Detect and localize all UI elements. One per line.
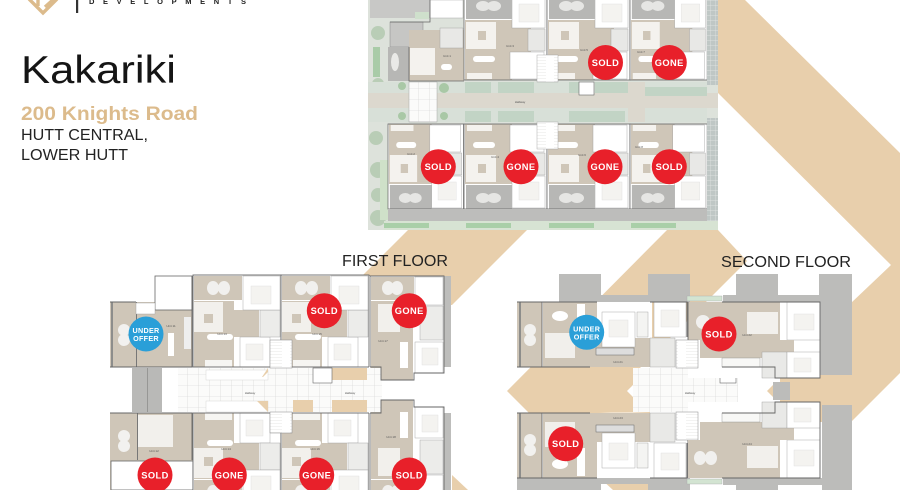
background tan diagonal bands	[363, 0, 900, 490]
units 22 and 24	[688, 302, 820, 478]
badges: second floor status	[548, 315, 736, 461]
lower units	[388, 124, 707, 209]
badge: under offer	[128, 316, 164, 352]
room labels: Unit 7	[637, 50, 645, 54]
room labels	[149, 324, 396, 453]
address lines: LOWER HUTT	[21, 147, 129, 164]
heading: second floor: SECOND FLOOR	[721, 254, 851, 271]
deck and planter	[384, 209, 718, 230]
second floor stairs and balconies	[676, 296, 722, 484]
room labels: Unit 14	[221, 447, 231, 451]
room labels	[407, 44, 645, 159]
badge: sold	[702, 316, 736, 352]
badge: gone	[652, 45, 687, 80]
room labels: Hallway	[345, 391, 356, 395]
room labels: Hallway	[245, 391, 256, 395]
room labels: Unit 22	[742, 333, 752, 337]
badge: gone	[392, 293, 427, 328]
unit 11	[110, 276, 192, 367]
room labels: Unit 4	[491, 155, 499, 159]
badge: under offer: OFFER	[574, 332, 600, 342]
badges: ground floor status	[421, 45, 687, 184]
ground hallway	[368, 82, 718, 122]
badge: gone: GONE	[507, 162, 535, 172]
room labels: Unit 2	[407, 152, 415, 156]
room labels: Unit 17	[378, 339, 388, 343]
panel: second floor plan	[517, 254, 852, 490]
units 17 and 18	[369, 276, 451, 490]
units 14 and 16	[193, 413, 369, 490]
upper units	[464, 0, 707, 80]
badge: gone: GONE	[591, 162, 619, 172]
badge: sold	[421, 149, 456, 184]
badge: gone	[588, 149, 622, 184]
room labels: Unit 3	[506, 44, 514, 48]
badge: under offer: UNDER	[132, 326, 160, 335]
room labels: Unit 18	[386, 435, 396, 439]
badge: sold: SOLD	[141, 470, 169, 480]
panel: first floor plan	[110, 253, 451, 490]
room labels: Unit 15	[312, 332, 322, 336]
badge: sold	[652, 149, 687, 184]
badge: sold: SOLD	[311, 306, 338, 316]
room labels: Unit 1	[443, 54, 451, 58]
badge: sold: SOLD	[656, 162, 683, 172]
room labels: Unit 21	[613, 360, 623, 364]
first floor corridor	[132, 368, 382, 412]
badge: gone: GONE	[302, 470, 331, 480]
logo	[29, 0, 246, 13]
badge: under offer: OFFER	[133, 334, 159, 343]
room labels: Unit 12	[149, 449, 159, 453]
room labels: Hallway	[685, 391, 696, 395]
stairs and lift	[537, 55, 594, 149]
unit 1	[388, 0, 464, 81]
room labels: Unit 24	[742, 442, 752, 446]
badge: gone: GONE	[395, 306, 424, 316]
room labels: Unit 6	[578, 153, 586, 157]
second floor corridor	[627, 368, 773, 412]
address heading: 200 Knights Road	[21, 104, 198, 125]
badge: sold: SOLD	[552, 439, 579, 449]
badge: gone: GONE	[655, 58, 684, 68]
room labels	[613, 333, 752, 446]
badge: under offer	[569, 315, 604, 350]
badge: sold	[588, 45, 623, 80]
unit 12	[110, 413, 193, 490]
badge: sold	[307, 293, 342, 328]
heading: first floor: FIRST FLOOR	[342, 253, 448, 270]
room labels: Unit 5	[580, 48, 588, 52]
address lines	[21, 127, 148, 164]
first floor stairs	[270, 340, 292, 433]
badge: sold: SOLD	[396, 470, 423, 480]
badge: sold: SOLD	[425, 162, 452, 172]
units 13 and 15	[193, 275, 369, 367]
address lines: HUTT CENTRAL,	[21, 127, 148, 144]
units 21 and 23	[517, 302, 687, 478]
title: Kakariki	[21, 49, 176, 92]
badge: gone	[504, 149, 538, 184]
room labels: Unit 11	[166, 324, 176, 328]
panel: ground floor plan	[368, 0, 718, 230]
room labels: Unit 8	[635, 145, 643, 149]
badge: gone	[212, 458, 247, 490]
badge: sold: SOLD	[705, 329, 733, 339]
badge: sold: SOLD	[592, 58, 619, 68]
room labels: Unit 23	[613, 416, 623, 420]
room labels: Unit 13	[217, 332, 227, 336]
badge: gone	[299, 458, 334, 490]
icon: logo chevrons	[29, 0, 57, 13]
side paving	[707, 0, 718, 222]
badge: gone: GONE	[215, 470, 244, 480]
roofs	[517, 274, 852, 490]
badges: first floor status	[128, 293, 427, 490]
badge: under offer: UNDER	[573, 324, 601, 333]
badge: sold	[548, 426, 583, 461]
room labels: Unit 16	[310, 447, 320, 451]
room labels: Hallway	[515, 100, 526, 104]
badge: sold	[138, 458, 172, 490]
badge: sold	[392, 458, 427, 490]
